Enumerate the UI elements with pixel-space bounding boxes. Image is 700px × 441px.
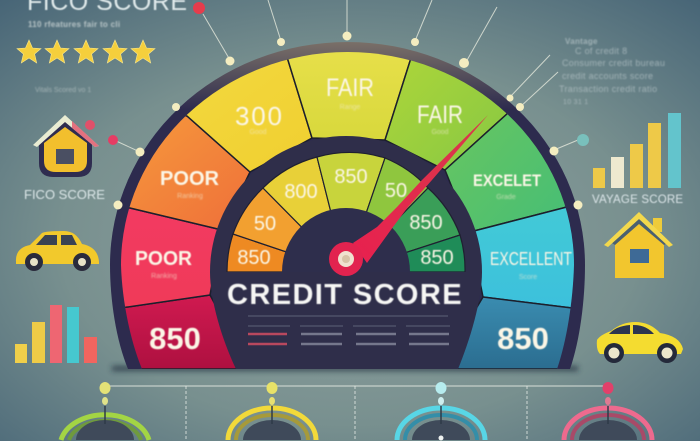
- bottom gauge: green: [61, 382, 149, 440]
- inner band numbers: 850: [420, 247, 454, 269]
- right text block: Vantage: [565, 37, 598, 46]
- outer segment labels: [135, 74, 572, 356]
- bar chart right: [593, 113, 681, 188]
- five star rating: [17, 40, 155, 63]
- inner colour band: [227, 153, 465, 272]
- inner band numbers: 850: [237, 247, 271, 269]
- subtitle text: 110 rfeatures fair to cli: [28, 20, 120, 29]
- bottom gauge: pink: [564, 382, 652, 440]
- icon: house right: [604, 212, 673, 278]
- outer ring: [110, 42, 585, 369]
- outer segment labels: POOR: [135, 248, 193, 270]
- right text block: 10 31 1: [563, 99, 588, 106]
- outer segment small captions: Ranking: [151, 273, 177, 280]
- timeline: [105, 386, 608, 440]
- outer segment small captions: Good: [431, 129, 449, 136]
- dial hub dark semicircle: [282, 208, 410, 272]
- outer segment small captions: Range: [340, 104, 360, 111]
- right text block: Transaction credit ratio: [559, 84, 657, 94]
- outer segment small captions: Ranking: [177, 193, 203, 200]
- rim lights: [114, 32, 582, 210]
- gauge base shadow: [112, 366, 578, 371]
- outer segment labels: EXCELLENT: [490, 249, 572, 269]
- leader lines and dots: [85, 0, 589, 152]
- icon: car left: [16, 231, 99, 271]
- bottom gauge: yellow: [228, 382, 316, 440]
- outer segment small captions: Grade: [496, 194, 516, 201]
- outer segment labels: 850: [497, 321, 549, 356]
- bar chart left: [15, 305, 97, 363]
- label: VantageScore: VAYAGE SCORE: [592, 194, 683, 206]
- outer segment small captions: Score: [519, 274, 537, 281]
- inner band numbers: 50: [254, 213, 276, 235]
- heading: credit score: CREDIT SCORE: [227, 279, 463, 311]
- inner band numbers: [237, 166, 454, 269]
- outer segment labels: 850: [149, 321, 201, 356]
- inner band numbers: 850: [334, 166, 368, 188]
- main gauge: [110, 32, 585, 369]
- bottom gauge: cyan: [397, 382, 485, 440]
- inner band numbers: 50: [385, 180, 407, 202]
- label: FICO score under house: FICO SCORE: [24, 187, 105, 202]
- outer segment labels: FAIR: [417, 101, 463, 129]
- caption under stars: Vitals Scored vo 1: [35, 87, 91, 94]
- inner dark dial: [210, 136, 482, 369]
- outer colour segments: [121, 52, 574, 369]
- icon: car right: [597, 322, 683, 363]
- outer segment labels: FAIR: [326, 74, 374, 102]
- outer segment small captions: Good: [249, 129, 267, 136]
- outer segment small captions: [151, 104, 537, 281]
- icon: house left: [33, 115, 99, 177]
- right text block: credit accounts score: [562, 71, 653, 81]
- inner band numbers: 850: [409, 212, 443, 234]
- right text block: Consumer credit bureau: [562, 58, 665, 68]
- right text block: [559, 37, 665, 106]
- needle: [329, 115, 488, 276]
- dial detail rows: [248, 316, 450, 344]
- outer segment labels: POOR: [160, 168, 220, 190]
- right text block: C of credit 8: [575, 46, 627, 56]
- outer segment labels: EXCELET: [473, 171, 542, 190]
- inner band numbers: 800: [284, 181, 318, 203]
- outer segment labels: 300: [235, 101, 282, 131]
